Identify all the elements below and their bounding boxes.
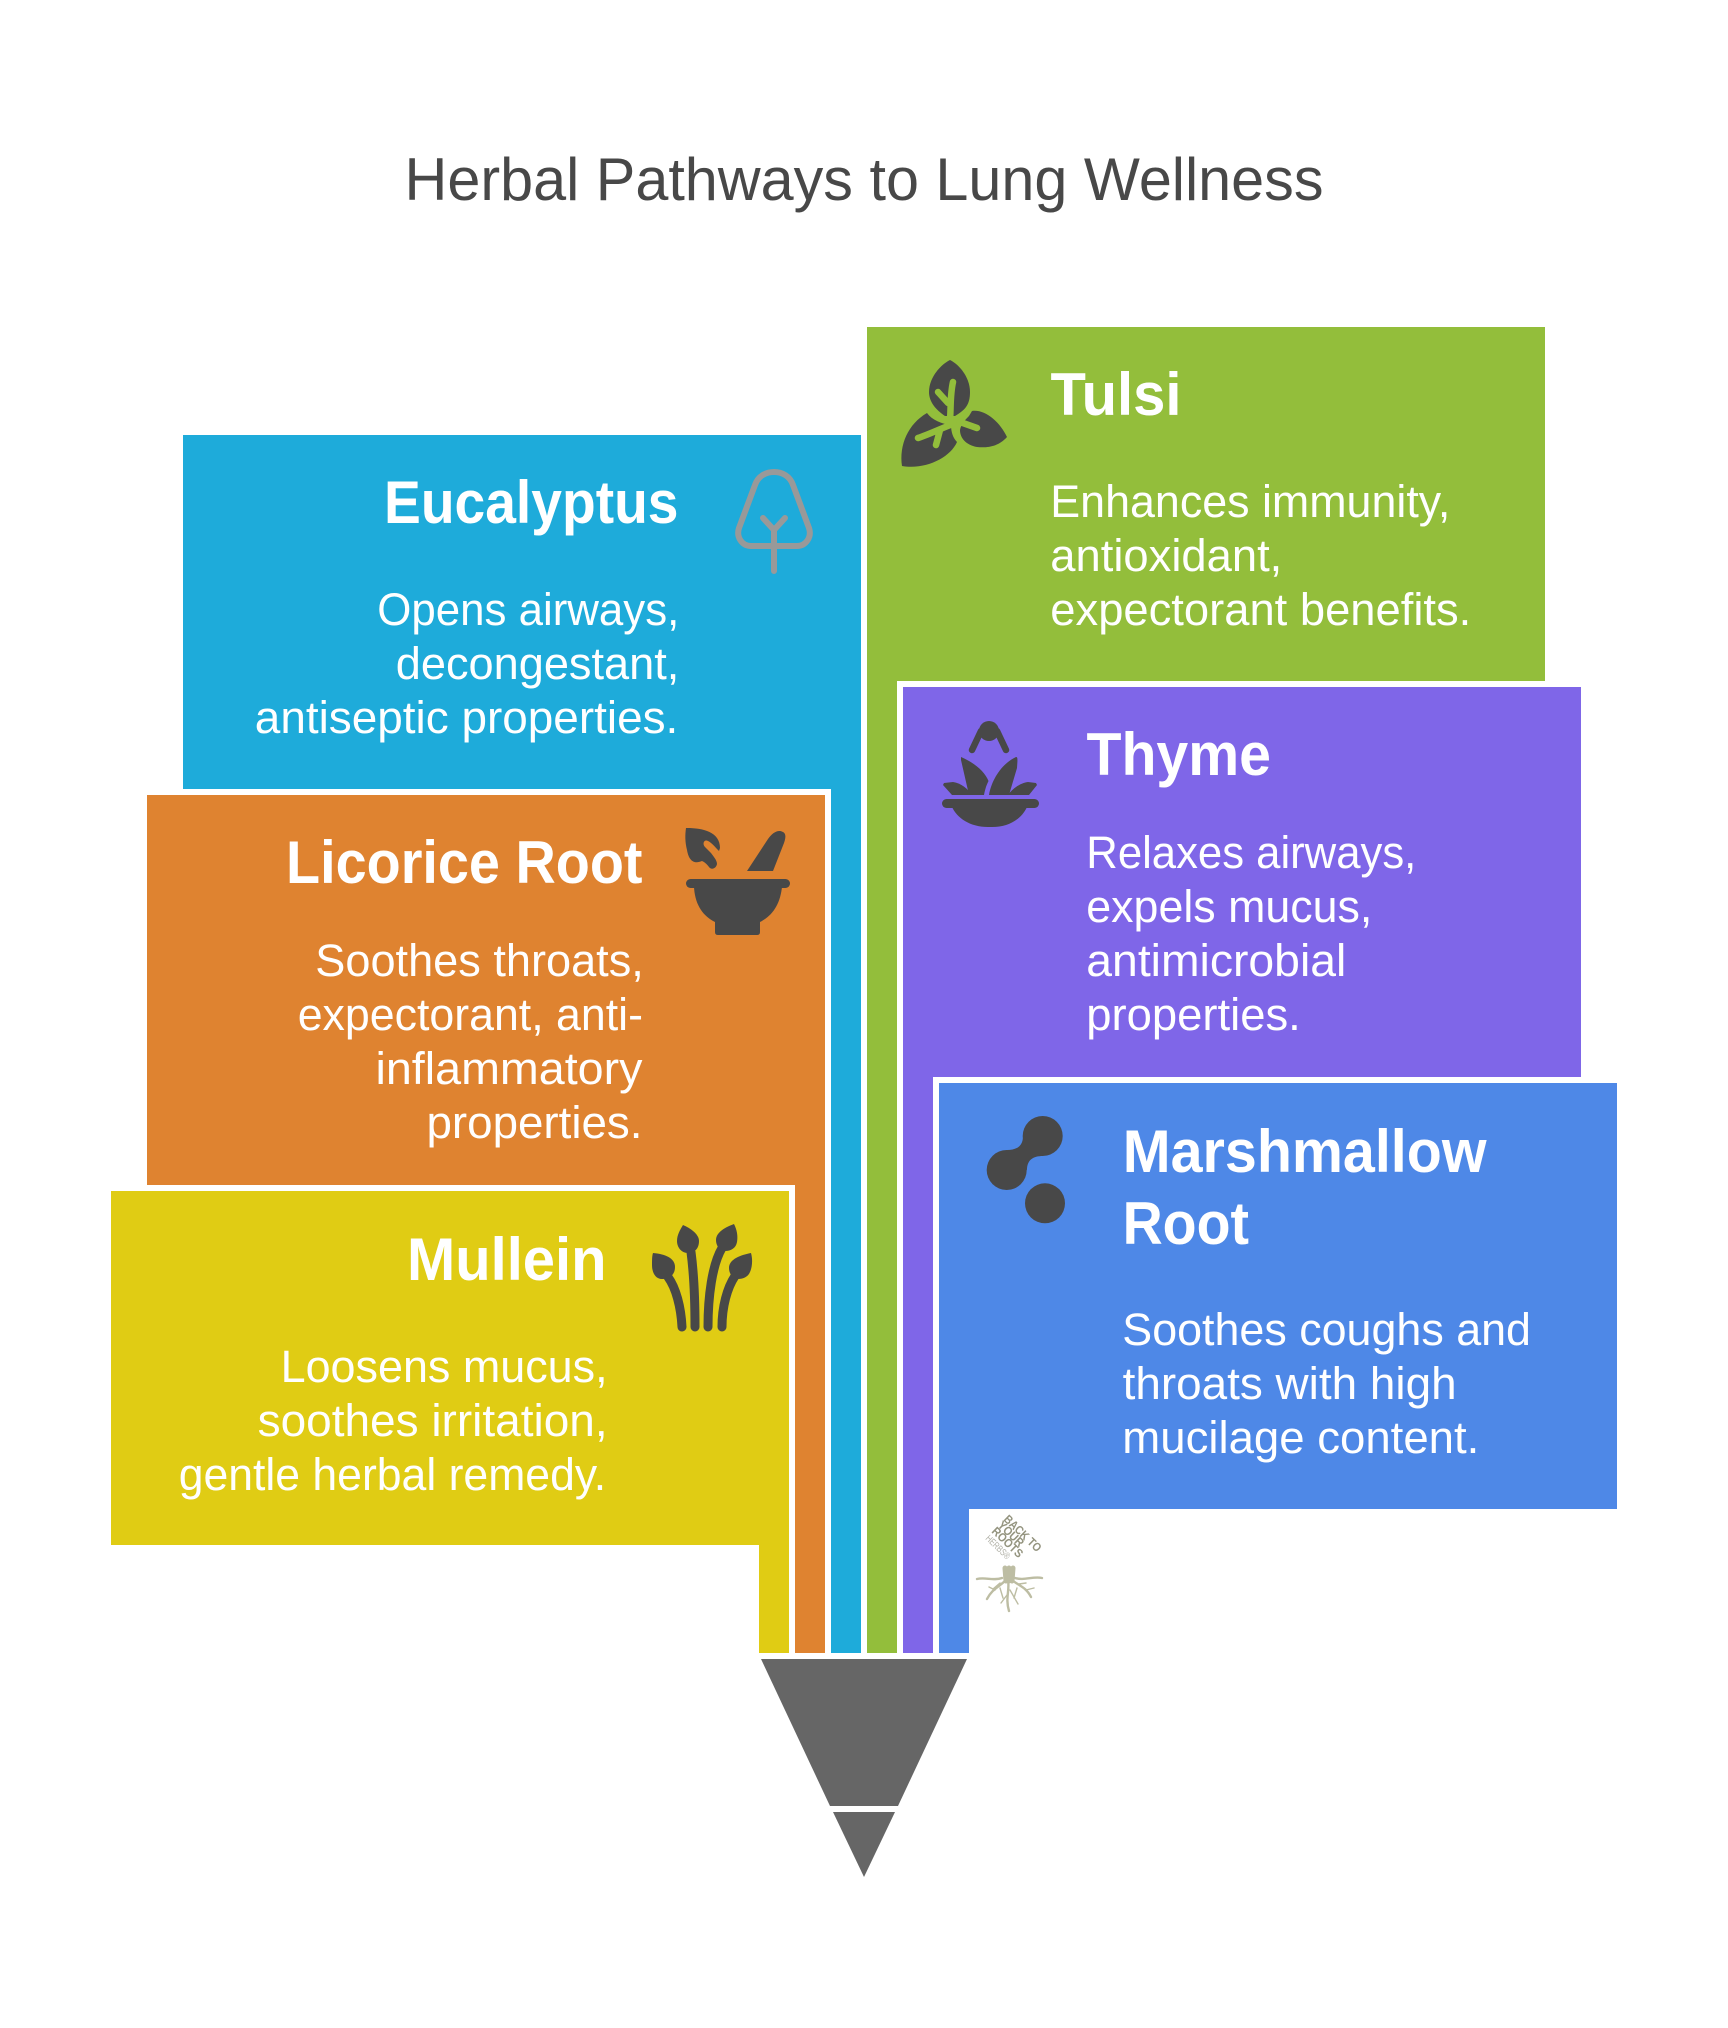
heading: Marshmallow Root bbox=[1123, 1118, 1487, 1257]
text: Thyme description: Relaxes airways, bbox=[1086, 827, 1416, 878]
text: Mullein description: Loosens mucus, bbox=[281, 1341, 608, 1392]
logo: Back To Your Roots Herbs bbox=[977, 1512, 1044, 1611]
text: Eucalyptus description bbox=[255, 584, 679, 743]
icon: tulsi leaves bbox=[901, 360, 1007, 467]
text: Tulsi description: Enhances immunity, bbox=[1050, 476, 1450, 527]
text: Licorice Root description: properties. bbox=[426, 1097, 642, 1148]
panel: Tulsi bbox=[867, 327, 1545, 1653]
text: Eucalyptus description: decongestant, bbox=[396, 638, 679, 689]
text: Mullein description: soothes irritation, bbox=[258, 1395, 608, 1446]
icon: mortar and pestle bbox=[685, 828, 790, 935]
text: Licorice Root description: inflammatory bbox=[376, 1043, 643, 1094]
text: Marshmallow Root description bbox=[1122, 1304, 1531, 1463]
text: Marshmallow Root description: Soothes coughs and bbox=[1122, 1304, 1531, 1355]
logo: Back To Your Roots Herbs: BACK TO bbox=[1001, 1512, 1044, 1555]
text: Tulsi description bbox=[1050, 476, 1471, 635]
text: Marshmallow Root description: throats with high bbox=[1123, 1358, 1457, 1409]
text: Eucalyptus description: antiseptic properties. bbox=[255, 692, 678, 743]
panel: Thyme bbox=[903, 687, 1581, 1653]
funnel: upper trapezoid bbox=[761, 1659, 967, 1806]
text: Eucalyptus description: Opens airways, bbox=[377, 584, 679, 635]
icon: thyme bowl bbox=[942, 721, 1039, 827]
heading: Marshmallow Root: Root bbox=[1123, 1190, 1249, 1257]
icon: mullein sprouts bbox=[652, 1224, 752, 1327]
text: Marshmallow Root description: mucilage content. bbox=[1122, 1412, 1479, 1463]
heading: Licorice Root: Licorice Root bbox=[286, 829, 643, 896]
heading: Mullein: Mullein bbox=[407, 1226, 606, 1293]
icon: tree outline bbox=[738, 472, 810, 571]
icon: tree roots bbox=[977, 1568, 1042, 1611]
title: Herbal Pathways to Lung Wellness bbox=[404, 146, 1324, 213]
logo: Back To Your Roots Herbs: HERBS® bbox=[983, 1533, 1012, 1562]
text: Licorice Root description: Soothes throats, bbox=[315, 935, 644, 986]
heading: Thyme: Thyme bbox=[1086, 721, 1271, 788]
panel: Eucalyptus bbox=[183, 435, 861, 1653]
heading: Marshmallow Root: Marshmallow bbox=[1123, 1118, 1487, 1185]
funnel: lower triangle bbox=[833, 1812, 895, 1877]
text: Thyme description bbox=[1086, 827, 1416, 1040]
text: Mullein description: gentle herbal remedy. bbox=[179, 1449, 606, 1500]
text: Thyme description: properties. bbox=[1086, 989, 1301, 1040]
text: Licorice Root description bbox=[298, 935, 644, 1148]
text: Tulsi description: expectorant benefits. bbox=[1050, 584, 1471, 635]
text: Licorice Root description: expectorant, anti- bbox=[298, 989, 643, 1040]
heading: Tulsi: Tulsi bbox=[1050, 361, 1182, 428]
panel: Licorice Root bbox=[147, 795, 825, 1653]
panel: Mullein bbox=[111, 1191, 789, 1653]
text: Thyme description: expels mucus, bbox=[1086, 881, 1372, 932]
text: Thyme description: antimicrobial bbox=[1086, 935, 1346, 986]
logo: Back To Your Roots Herbs: ROOTS bbox=[989, 1524, 1026, 1561]
logo: Back To Your Roots Herbs: YOUR bbox=[995, 1518, 1027, 1550]
text: Tulsi description: antioxidant, bbox=[1050, 530, 1282, 581]
panel: Marshmallow Root bbox=[939, 1083, 1617, 1653]
heading: Eucalyptus: Eucalyptus bbox=[384, 469, 678, 536]
icon: molecule dots bbox=[987, 1116, 1065, 1223]
text: Mullein description bbox=[179, 1341, 608, 1500]
